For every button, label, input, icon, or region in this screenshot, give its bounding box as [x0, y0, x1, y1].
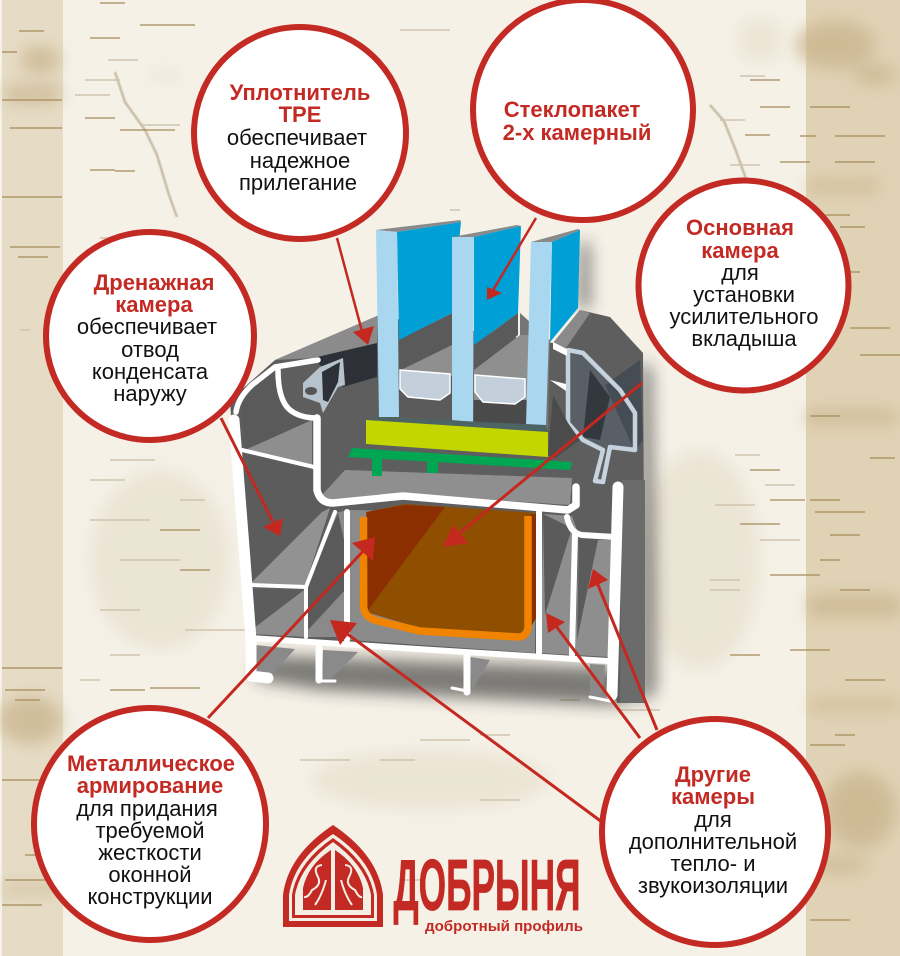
callout: drainage chamber: конденсата [92, 359, 209, 384]
green support [348, 448, 572, 476]
small left chamber [249, 588, 306, 637]
callout: other chambers [602, 719, 828, 945]
callout: drainage chamber: наружу [113, 381, 187, 406]
callout: glass unit: Стеклопакет [504, 97, 640, 122]
yellow-green gasket block [366, 417, 548, 457]
callout: glass unit [473, 0, 693, 220]
callout: drainage chamber [46, 232, 254, 440]
diagonal chamber [306, 511, 346, 637]
callout: main chamber: установки [693, 282, 795, 307]
profile body [230, 310, 645, 703]
callout: other chambers: Другие [675, 762, 751, 787]
glass gaps [399, 313, 530, 425]
arrow: main chamber [443, 383, 642, 547]
callout: glass unit: 2-х камерный [503, 120, 651, 145]
callout: other chambers: дополнительной [629, 829, 797, 854]
callout: reinforcement: для придания [76, 796, 218, 821]
callout: other chambers: для [694, 807, 732, 832]
callout: reinforcement: оконной [108, 862, 192, 887]
callout: main chamber: вкладыша [691, 326, 797, 351]
pane 2 [452, 225, 521, 422]
arrow: other chamber, right [588, 569, 657, 730]
logo: Dobrynya [283, 825, 583, 935]
arrow: reinforcement [208, 537, 375, 718]
callout: other chambers: звукоизоляции [638, 873, 788, 898]
arrow: other chamber, bottom [330, 620, 606, 825]
callout: main chamber: усилительного [670, 304, 818, 329]
callout: reinforcement: требуемой [95, 818, 205, 843]
back top band [275, 316, 377, 360]
arrow: drainage chamber [221, 418, 283, 536]
callout: seal: TPE [279, 102, 321, 127]
callout: drainage chamber: отвод [121, 337, 179, 362]
right gasket [548, 310, 643, 482]
upper left chamber [240, 373, 312, 465]
window sash shadow [520, 313, 550, 430]
callout: reinforcement: конструкции [87, 884, 213, 909]
callout: main chamber: для [721, 260, 759, 285]
steel reinforcement [364, 504, 537, 637]
callout: reinforcement [34, 708, 266, 940]
callout: reinforcement: жесткости [98, 840, 202, 865]
callout: seal: прилегание [239, 170, 357, 195]
pane 3 [526, 229, 580, 425]
callout: drainage chamber: обеспечивает [77, 314, 217, 339]
callout: main chamber: камера [701, 238, 779, 263]
callout: main chamber [638, 180, 848, 390]
callout: main chamber: Основная [686, 215, 794, 240]
sill floor [322, 470, 572, 505]
glass unit [376, 220, 580, 425]
arrow: glass unit [487, 218, 536, 300]
main chamber interior [349, 510, 536, 653]
logo tagline: добротный профиль [425, 918, 583, 935]
bottom legs [255, 645, 605, 700]
callout: other chambers: тепло- и [670, 851, 756, 876]
window profile cross-section [230, 220, 645, 703]
spacers [400, 370, 450, 400]
callout: seal: обеспечивает [227, 125, 367, 150]
callout: drainage chamber: Дренажная [94, 270, 214, 295]
white frame [234, 360, 618, 701]
callout: drainage chamber: камера [115, 292, 193, 317]
callout: reinforcement: Металлическое [67, 751, 235, 776]
callout: seal [194, 27, 406, 239]
pane 1 [376, 220, 461, 417]
logo emblem [283, 825, 383, 927]
right chambers [541, 514, 613, 657]
callout: seal: Уплотнитель [230, 80, 370, 105]
right side face [620, 480, 645, 703]
profile shadow [255, 240, 656, 705]
left gasket [303, 358, 345, 413]
callout: reinforcement: армирование [77, 773, 223, 798]
drainage chamber [243, 454, 330, 586]
arrow: other chamber, middle [546, 613, 640, 738]
arrow: seal [337, 238, 374, 345]
callout: other chambers: камеры [671, 784, 755, 809]
text: ДОБРЫНЯ [394, 846, 580, 926]
callout: seal: надежное [250, 148, 350, 173]
